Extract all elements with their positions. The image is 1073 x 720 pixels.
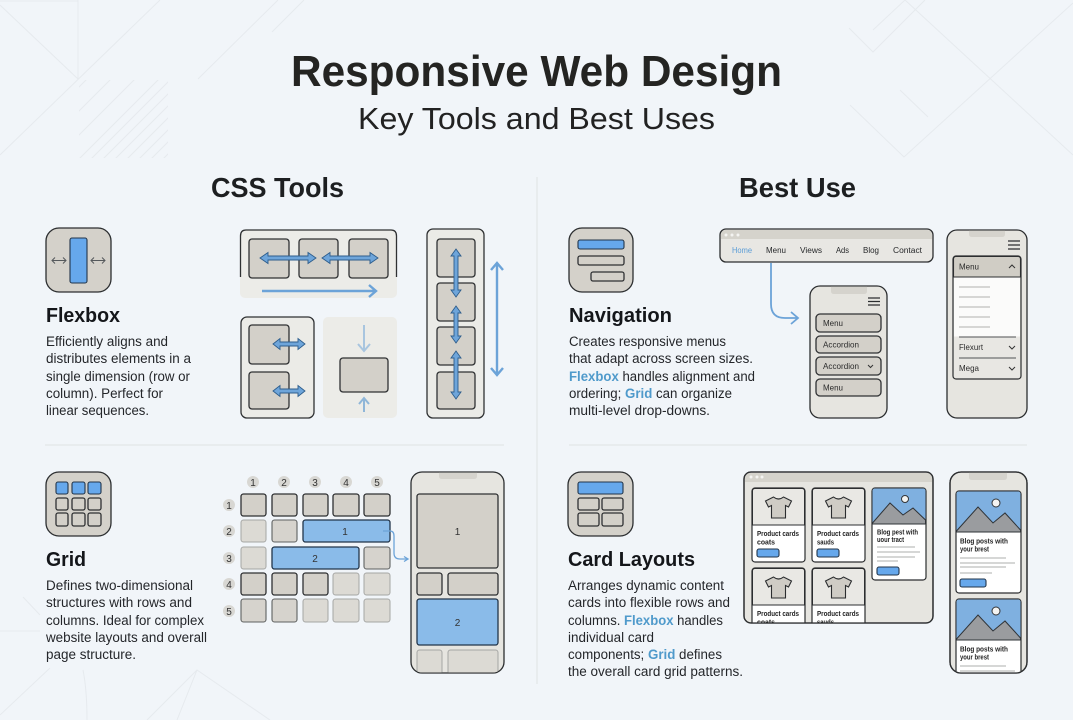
grid axis labels: 1 xyxy=(226,501,232,512)
panel: navigation xyxy=(569,228,1027,418)
navigation heading: Navigation xyxy=(569,305,672,327)
navigation description: Creates responsive menus xyxy=(569,334,726,349)
product card 2: Product cards xyxy=(817,531,859,538)
navigation description xyxy=(569,334,755,418)
grid description: Defines two-dimensional xyxy=(46,578,193,593)
phone with menu buttons: Accordion xyxy=(823,340,859,350)
grid axis labels: 5 xyxy=(374,478,380,489)
blog card bottom: Blog posts with xyxy=(960,646,1008,654)
heading: Best Use: Best Use xyxy=(739,172,856,203)
browser nav bar: Blog xyxy=(863,246,879,255)
product card 3: Product cards xyxy=(757,611,799,618)
grid axis labels xyxy=(223,476,383,618)
grid axis labels: 5 xyxy=(226,607,232,618)
browser nav bar: Home xyxy=(732,246,753,255)
grid cells: 1 xyxy=(342,527,348,538)
icon: flexbox xyxy=(46,228,111,292)
navigation description: ordering; Grid can organize xyxy=(569,386,732,401)
heading: CSS Tools: CSS Tools xyxy=(211,172,344,203)
blog card top: your brest xyxy=(960,546,990,554)
grid description: structures with rows and xyxy=(46,595,192,610)
navigation description: Flexbox handles alignment and xyxy=(569,369,755,384)
product card 4 xyxy=(811,567,866,622)
phone with accordion: Flexurt xyxy=(959,342,984,352)
panel: card layouts xyxy=(568,472,1027,701)
blog card: Blog pest with xyxy=(877,530,918,536)
grid axis labels: 4 xyxy=(226,580,232,591)
blog card bottom xyxy=(955,598,1022,672)
flexbox description: Efficiently aligns and xyxy=(46,334,168,349)
card layouts heading: Card Layouts xyxy=(568,549,695,571)
phone with menu buttons: Accordion xyxy=(823,361,859,371)
product card 4: Product cards xyxy=(817,611,859,618)
grid description: columns. Ideal for complex xyxy=(46,613,204,628)
browser nav bar: Views xyxy=(800,246,822,255)
grid axis labels: 3 xyxy=(226,554,232,565)
blog card top: Blog posts with xyxy=(960,538,1008,546)
grid axis labels: 2 xyxy=(226,527,232,538)
browser nav bar: Ads xyxy=(836,246,849,255)
navigation description: multi-level drop-downs. xyxy=(569,403,710,418)
grid axis labels: 1 xyxy=(250,478,256,489)
flexbox description: single dimension (row or xyxy=(46,369,191,384)
flexbox description xyxy=(46,334,192,418)
card layouts description: the overall card grid patterns. xyxy=(568,664,743,679)
icon: grid xyxy=(46,472,111,536)
flexbox heading: Flexbox xyxy=(46,305,120,327)
phone with menu buttons: Menu xyxy=(823,318,843,328)
grid cells: 2 xyxy=(312,554,318,565)
product card 1 xyxy=(752,488,805,562)
blog card top xyxy=(956,491,1021,593)
grid description xyxy=(45,578,207,662)
grid axis labels: 4 xyxy=(343,478,349,489)
icon: navigation xyxy=(569,228,633,292)
title: Responsive Web Design xyxy=(291,47,782,96)
phone with menu buttons xyxy=(810,286,887,418)
card layouts description: components; Grid defines xyxy=(568,647,722,662)
product card 4: sauds xyxy=(817,620,834,626)
navigation description: that adapt across screen sizes. xyxy=(569,351,753,366)
diagram: column direction xyxy=(427,229,503,418)
arrow: grid to phone xyxy=(383,531,408,562)
blog card bottom: your brest xyxy=(960,654,990,662)
flexbox description: column). Perfect for xyxy=(46,386,164,401)
panel: flexbox xyxy=(46,228,503,418)
grid phone mockup: 2 xyxy=(455,618,461,629)
card layouts description: Arranges dynamic content xyxy=(568,578,724,593)
grid description: website layouts and overall xyxy=(45,630,207,645)
browser card grid xyxy=(744,472,933,642)
grid phone mockup: 1 xyxy=(455,527,461,538)
diagram: stacked items xyxy=(241,317,314,418)
product card 2 xyxy=(812,488,865,562)
product card 3: coats xyxy=(757,620,775,626)
card layouts description: cards into flexible rows and xyxy=(568,595,730,610)
phone with menu buttons: Menu xyxy=(823,382,843,392)
phone card stack xyxy=(950,472,1027,701)
subtitle: Key Tools and Best Uses xyxy=(358,101,715,136)
arrow: browser to phone xyxy=(771,263,798,324)
product card 1: Product cards xyxy=(757,531,799,538)
grid cells xyxy=(241,494,390,622)
grid axis labels: 3 xyxy=(312,478,318,489)
flexbox description: linear sequences. xyxy=(46,403,149,418)
browser nav bar xyxy=(720,229,933,262)
icon: card layouts xyxy=(568,472,633,536)
grid description: page structure. xyxy=(46,647,136,662)
diagram: row direction xyxy=(240,230,397,298)
product card 3 xyxy=(751,567,806,622)
panel: grid xyxy=(45,472,504,680)
blog card: uour tract xyxy=(877,537,905,544)
browser nav bar: Contact xyxy=(893,246,923,255)
blog card xyxy=(872,488,926,580)
phone with accordion xyxy=(947,230,1027,418)
phone with accordion: Mega xyxy=(959,363,979,373)
grid phone mockup xyxy=(411,472,504,680)
card layouts description xyxy=(568,578,743,679)
phone with accordion: Menu xyxy=(959,262,979,272)
product card 2: sauds xyxy=(817,540,834,546)
grid heading: Grid xyxy=(46,549,86,571)
card layouts description: individual card xyxy=(568,630,654,645)
flexbox description: distributes elements in a xyxy=(46,351,192,366)
product card 1: coats xyxy=(757,540,775,546)
diagram: centered item xyxy=(323,317,397,418)
browser nav bar: Menu xyxy=(766,246,786,255)
grid axis labels: 2 xyxy=(281,478,287,489)
card layouts description: columns. Flexbox handles xyxy=(568,613,723,628)
